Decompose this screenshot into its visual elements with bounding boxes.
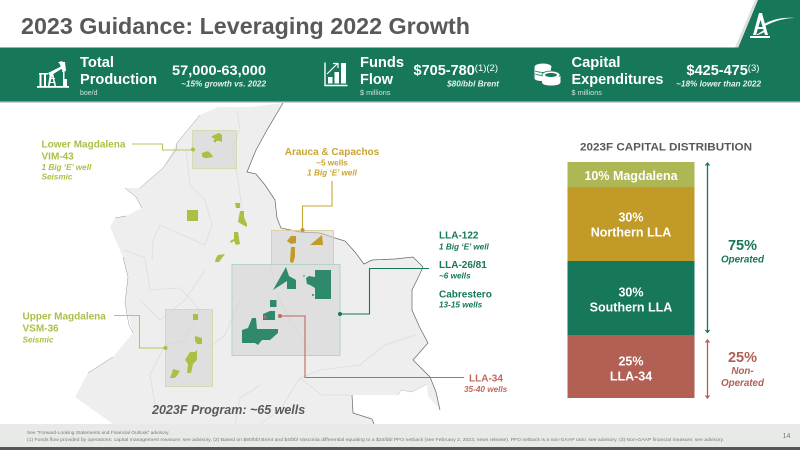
value: capex guidance: $425-475 bbox=[686, 63, 748, 79]
blocks: Magdalena acreage bbox=[170, 133, 247, 378]
label: LLA-26/81: ~6 wells bbox=[439, 272, 471, 280]
segment: Magdalena bbox=[568, 162, 694, 187]
footer band bbox=[0, 424, 800, 450]
highlight box: Upper Magdalena bbox=[166, 310, 212, 386]
label: Lower Magdalena: 1 Big ‘E’ well bbox=[42, 163, 92, 172]
leader: Arauca and Capachos bbox=[300, 181, 332, 232]
icon: derrick logo bbox=[750, 13, 795, 38]
text: Capital Expenditures bbox=[572, 55, 664, 97]
label: Lower Magdalena: Seismic bbox=[42, 172, 73, 182]
callout: 25% non-operated: 25% bbox=[728, 350, 757, 366]
chart heading: 2023F CAPITAL DISTRIBUTION bbox=[580, 142, 752, 154]
leader: Llanos bbox=[338, 268, 429, 316]
label: LLA-34 bbox=[464, 374, 508, 394]
label: LLA-34: 35-40 wells bbox=[464, 385, 508, 394]
segment: Southern LLA: 30% bbox=[618, 286, 644, 300]
segment: Northern LLA: Northern LLA bbox=[591, 226, 671, 240]
footnotes: See “Forward-Looking Statements and Financial Outlook” advisory. bbox=[27, 430, 170, 436]
leader: Upper Magdalena bbox=[114, 316, 168, 350]
label: Arauca and Capachos: ~5 wells bbox=[316, 158, 348, 168]
segment: LLA-34 bbox=[568, 335, 694, 398]
label: Lower Magdalena: Lower Magdalena bbox=[42, 140, 126, 150]
text: Funds Flow: $ millions bbox=[360, 88, 391, 97]
value: funds flow guidance: $705-780 bbox=[414, 63, 475, 79]
label: Cabrestero: Cabrestero bbox=[439, 290, 492, 300]
value: capex guidance: ~18% lower than 2022 bbox=[676, 80, 761, 88]
segment: Magdalena: 10% Magdalena bbox=[584, 169, 679, 183]
arrow: operated range bbox=[706, 163, 710, 332]
highlight box: Lower Magdalena bbox=[192, 130, 236, 168]
value: production guidance: 57,000-63,000 bbox=[172, 62, 266, 78]
value: funds flow guidance: $80/bbl Brent bbox=[446, 80, 499, 88]
segment: Northern LLA bbox=[568, 187, 694, 261]
label: Upper Magdalena: VSM-36 bbox=[22, 324, 59, 334]
blocks: Llanos acreage bbox=[242, 267, 331, 345]
blocks: Arauca and Capachos acreage bbox=[287, 235, 323, 263]
leader: LLA-34 bbox=[278, 314, 464, 378]
callout: 25% non-operated: Operated bbox=[721, 378, 765, 389]
page number: 14 bbox=[783, 433, 790, 440]
footnotes: (1) Funds flow provided by operations: capital management measure; see advisory. (2) Based on $80/bbl Brent and $4/bbl Vasconia differential equating to a $34/bbl PFO netback (see February 2, 2023, news release). PFO netback is a non-GAAP ratio; see advisory. (3) Non-GAAP financial measure; see advisory. bbox=[27, 437, 724, 443]
label: LLA-26/81: LLA-26/81 bbox=[439, 260, 487, 271]
footnotes bbox=[27, 430, 724, 443]
stacked bar: capital distribution bbox=[568, 162, 694, 398]
callout: 25% non-operated: Non- bbox=[731, 366, 754, 377]
icon: bar chart bbox=[325, 62, 348, 86]
value: production guidance: ~15% growth vs. 2022 bbox=[181, 80, 266, 88]
segment: LLA-34: LLA-34 bbox=[610, 370, 652, 384]
label: Lower Magdalena: VIM-43 bbox=[42, 152, 74, 162]
segment: Northern LLA: 30% bbox=[618, 210, 644, 224]
label: LLA-122: 1 Big ‘E’ well bbox=[439, 242, 489, 252]
value: capex guidance: (3) bbox=[748, 63, 759, 74]
label: Lower Magdalena bbox=[42, 140, 126, 182]
label: LLA-26/81 bbox=[439, 260, 487, 280]
map: Colombia basin outline bbox=[75, 103, 440, 424]
logo corner tab bbox=[735, 0, 800, 48]
label: Arauca and Capachos: 1 Big ‘E’ well bbox=[307, 168, 358, 178]
segment: Southern LLA: Southern LLA bbox=[590, 300, 672, 314]
label: LLA-122: LLA-122 bbox=[439, 230, 479, 242]
text: Funds Flow bbox=[360, 55, 404, 97]
label: Upper Magdalena: Upper Magdalena bbox=[22, 312, 106, 322]
segment: Southern LLA bbox=[568, 261, 694, 335]
label: program total: 2023F Program: ~65 wells bbox=[151, 403, 305, 417]
text: Funds Flow: Flow bbox=[360, 72, 394, 88]
label: Arauca and Capachos: Arauca & Capachos bbox=[285, 147, 380, 158]
value: capex guidance bbox=[676, 63, 761, 88]
leader: Lower Magdalena bbox=[132, 144, 195, 152]
icon: coins bbox=[534, 64, 560, 86]
marker: LLA-34 hatch bbox=[264, 316, 266, 318]
callout: 75% operated bbox=[721, 238, 765, 266]
arrow: non-operated range bbox=[706, 340, 710, 398]
text: Funds Flow: Funds bbox=[360, 55, 404, 71]
text: Total Production: boe/d bbox=[80, 90, 98, 97]
icon: pump jack bbox=[37, 61, 69, 88]
value: funds flow guidance bbox=[414, 63, 499, 88]
highlight box: Arauca and Capachos bbox=[272, 230, 334, 264]
callout: 75% operated: Operated bbox=[721, 254, 765, 266]
text: Capital Expenditures: Capital bbox=[572, 55, 620, 71]
text: Capital Expenditures: $ millions bbox=[572, 88, 602, 97]
label: LLA-122 bbox=[439, 230, 489, 252]
label: Cabrestero: 13-15 wells bbox=[439, 300, 483, 310]
callout: 75% operated: 75% bbox=[728, 238, 757, 254]
text: Capital Expenditures: Expenditures bbox=[572, 72, 664, 88]
banner bbox=[0, 48, 800, 103]
label: Cabrestero bbox=[439, 290, 492, 310]
text: Total Production: Total bbox=[80, 55, 114, 71]
segment: LLA-34: 25% bbox=[618, 354, 644, 368]
label: Arauca and Capachos bbox=[285, 147, 380, 178]
highlight box: Llanos bbox=[232, 264, 340, 356]
value: production guidance bbox=[172, 62, 266, 88]
value: funds flow guidance: (1)(2) bbox=[475, 63, 498, 74]
title: 2023 Guidance: Leveraging 2022 Growth bbox=[21, 13, 470, 39]
label: LLA-34: LLA-34 bbox=[469, 374, 503, 384]
label: Upper Magdalena bbox=[22, 312, 106, 344]
callout: 25% non-operated bbox=[721, 350, 765, 389]
text: Total Production: Production bbox=[80, 72, 157, 88]
label: Upper Magdalena: Seismic bbox=[22, 336, 54, 344]
text: Total Production bbox=[80, 55, 157, 97]
